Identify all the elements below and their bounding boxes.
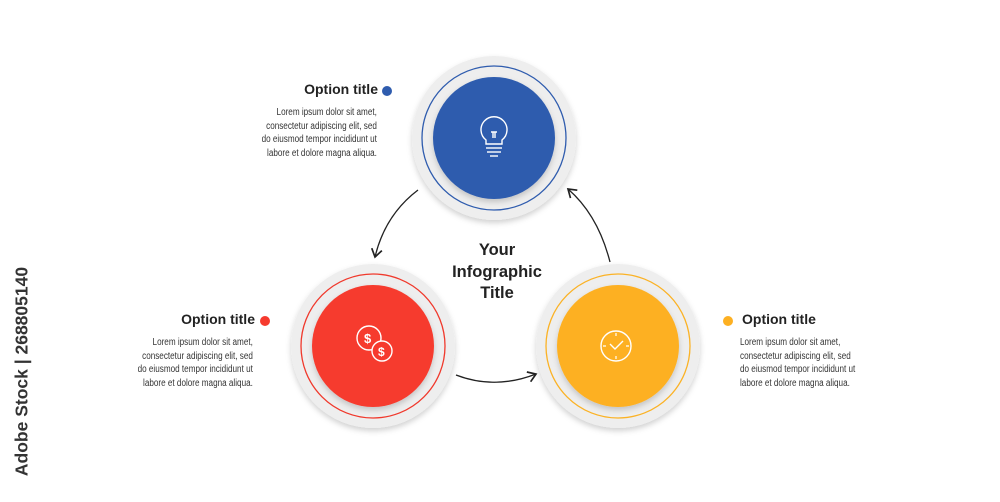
text: option 1: Option title [304, 81, 378, 97]
text: labore et dolore magna aliqua. [267, 148, 377, 159]
title: Your [479, 241, 515, 259]
text: Lorem ipsum dolor sit amet, [740, 337, 840, 348]
dots [382, 86, 392, 96]
icon: coins: $ [364, 331, 372, 346]
text: Lorem ipsum dolor sit amet, [277, 107, 377, 118]
circle: red [291, 264, 455, 428]
text: consectetur adipiscing elit, sed [740, 351, 851, 362]
watermark id: Adobe Stock | 268805140 [12, 267, 32, 476]
text: do eiusmod tempor incididunt ut [138, 364, 253, 375]
text: Lorem ipsum dolor sit amet, [153, 337, 253, 348]
text: option 2: Option title [181, 311, 255, 327]
text: labore et dolore magna aliqua. [143, 378, 253, 389]
circle: yellow [536, 264, 700, 428]
title: Infographic [452, 262, 542, 280]
icon: bulb [481, 117, 507, 156]
title [452, 241, 542, 302]
icon: coins [357, 326, 392, 361]
text: consectetur adipiscing elit, sed [266, 121, 377, 132]
arrow: top to red [375, 190, 418, 257]
text: do eiusmod tempor incididunt ut [262, 134, 377, 145]
arrow: yellow to top [568, 189, 610, 262]
icon: coins: $ [378, 345, 385, 359]
arrow: red to yellow [456, 374, 536, 382]
text: labore et dolore magna aliqua. [740, 378, 850, 389]
text: consectetur adipiscing elit, sed [142, 351, 253, 362]
text: do eiusmod tempor incididunt ut [740, 364, 855, 375]
title: Title [480, 284, 514, 302]
circle: blue top [412, 56, 576, 220]
text: option 3: Option title [742, 311, 816, 327]
icon: clock [601, 331, 631, 361]
